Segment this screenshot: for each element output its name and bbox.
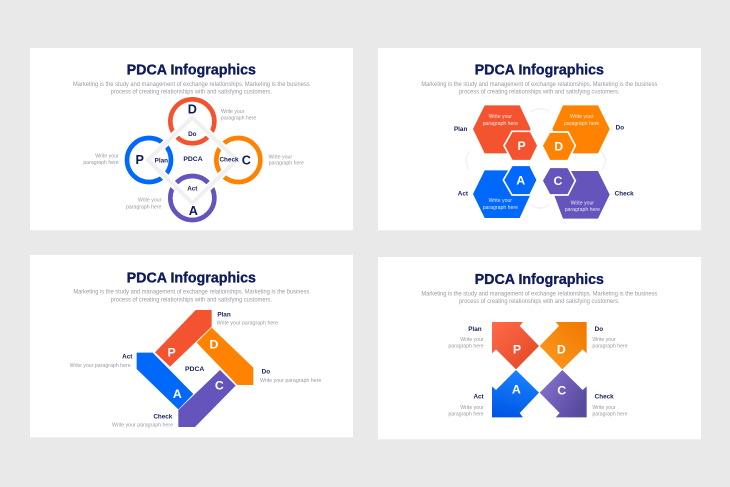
centre label: PDCA xyxy=(185,366,204,373)
ring letters: P xyxy=(135,153,144,167)
step labels xyxy=(468,326,614,400)
hexagon text: paragraph here xyxy=(565,207,600,213)
hexagon text: Write your xyxy=(570,114,594,120)
hexagon text xyxy=(483,114,600,213)
paragraph placeholders: Write your paragraph here xyxy=(260,378,321,384)
heading: PDCA Infographics xyxy=(127,62,256,79)
hexagon letters: A xyxy=(516,173,525,187)
paragraph placeholders: paragraph here xyxy=(83,160,119,166)
panel: arrows PDCA xyxy=(378,257,701,439)
panel: rotated bars PDCA xyxy=(30,255,353,437)
step labels: Check xyxy=(595,393,614,400)
arrow: act xyxy=(492,370,539,417)
hexagon letters: D xyxy=(554,139,563,153)
paragraph placeholders: Write your paragraph here xyxy=(217,321,278,327)
arrow: check xyxy=(540,370,587,417)
intro text: Marketing is the study and management of exchange relationships. Marketing is the business xyxy=(421,290,657,297)
paragraph placeholders: Write your paragraph here xyxy=(112,422,173,428)
paragraph placeholders: Write your xyxy=(138,198,162,204)
bar letters xyxy=(168,338,224,401)
panel: hexagon PDCA xyxy=(378,48,701,230)
paragraph placeholders: Write your paragraph here xyxy=(70,363,131,369)
ring letters xyxy=(135,102,251,218)
step labels: Do xyxy=(188,131,197,138)
paragraph placeholders: Write your xyxy=(592,405,616,411)
paragraph placeholders: paragraph here xyxy=(269,161,304,167)
step labels: Check xyxy=(219,157,239,164)
step labels xyxy=(155,131,239,193)
paragraph placeholders xyxy=(83,109,304,210)
paragraph placeholders: Write your xyxy=(269,154,292,160)
intro text: Marketing is the study and management of exchange relationships. Marketing is the business xyxy=(73,289,309,296)
paragraph placeholders: paragraph here xyxy=(448,412,484,418)
intro text xyxy=(73,289,309,303)
hexagon text: paragraph here xyxy=(564,121,599,127)
step labels xyxy=(122,312,270,420)
step labels: Act xyxy=(473,393,485,400)
paragraph placeholders: paragraph here xyxy=(592,344,628,350)
bar letters: P xyxy=(168,346,176,360)
bar: do xyxy=(197,328,253,385)
paragraph placeholders xyxy=(448,337,628,418)
bar: act xyxy=(137,353,193,409)
step labels: Plan xyxy=(454,126,467,133)
paragraph placeholders: Write your xyxy=(592,337,616,343)
step labels: Plan xyxy=(468,326,482,333)
step labels: Check xyxy=(153,413,173,420)
faint cycle arrows xyxy=(466,109,605,208)
heading: PDCA Infographics xyxy=(127,269,256,286)
step labels: Plan xyxy=(217,312,231,319)
step labels xyxy=(454,125,634,198)
arrow letters: A xyxy=(512,383,521,397)
hexagon text: paragraph here xyxy=(483,205,518,211)
hexagon text: Write your xyxy=(489,114,512,120)
intro text: Marketing is the study and management of exchange relationships. Marketing is the business xyxy=(421,81,657,88)
intro text xyxy=(421,290,657,305)
intro text: Marketing is the study and management of exchange relationships. Marketing is the business xyxy=(73,81,310,88)
intro text: process of creating relationships with and satisfying customers. xyxy=(111,89,272,96)
step labels: Act xyxy=(458,190,469,197)
panel: circular PDCA rings xyxy=(30,48,353,230)
step labels: Plan xyxy=(155,157,168,164)
arrow: plan xyxy=(492,322,539,369)
hexagon letters: C xyxy=(554,174,563,188)
hexagon text: paragraph here xyxy=(483,121,518,127)
bar letters: A xyxy=(173,387,182,401)
bar letters: D xyxy=(210,338,219,352)
hexagon letters xyxy=(516,139,563,188)
hexagon letters: P xyxy=(518,139,526,153)
intro text: process of creating relationships with and satisfying customers. xyxy=(459,298,620,305)
arrow letters: D xyxy=(557,343,566,357)
intro text: process of creating relationships with and satisfying customers. xyxy=(111,296,272,303)
heading: PDCA Infographics xyxy=(475,271,604,288)
hexagon text: Write your xyxy=(571,200,594,206)
step labels: Do xyxy=(262,368,270,375)
ring letters: A xyxy=(189,204,198,218)
heading: PDCA Infographics xyxy=(475,62,604,79)
bar: check xyxy=(178,370,236,427)
step labels: Check xyxy=(615,191,634,198)
step labels: Act xyxy=(187,186,198,193)
arrow letters: P xyxy=(513,343,521,357)
paragraph placeholders: Write your xyxy=(221,109,245,115)
step labels: Do xyxy=(616,125,624,132)
intro text xyxy=(73,81,310,96)
ring letters: C xyxy=(242,154,251,168)
paragraph placeholders: paragraph here xyxy=(592,412,628,418)
step labels: Do xyxy=(595,326,603,333)
linking diamond xyxy=(148,118,237,203)
four coloured rings xyxy=(127,99,260,220)
arrow: do xyxy=(540,322,587,369)
paragraph placeholders: Write your xyxy=(460,337,484,343)
small letter hexagons xyxy=(503,131,575,195)
bar letters: C xyxy=(215,378,224,392)
ring letters: D xyxy=(188,102,197,116)
intro text: process of creating relationships with and satisfying customers. xyxy=(459,89,620,96)
paragraph placeholders: paragraph here xyxy=(126,204,161,210)
paragraph placeholders: paragraph here xyxy=(221,116,256,122)
large hexagons xyxy=(473,105,610,219)
arrow letters: C xyxy=(557,383,566,397)
paragraph placeholders: Write your xyxy=(460,405,484,411)
paragraph placeholders: Write your xyxy=(95,153,119,159)
paragraph placeholders xyxy=(70,321,321,428)
intro text xyxy=(421,81,657,96)
step labels: PDCA xyxy=(183,156,203,163)
paragraph placeholders: paragraph here xyxy=(448,344,484,350)
bar: plan xyxy=(155,310,212,367)
arrow letters xyxy=(512,343,566,397)
step labels: Act xyxy=(122,353,133,360)
hexagon text: Write your xyxy=(489,198,512,204)
